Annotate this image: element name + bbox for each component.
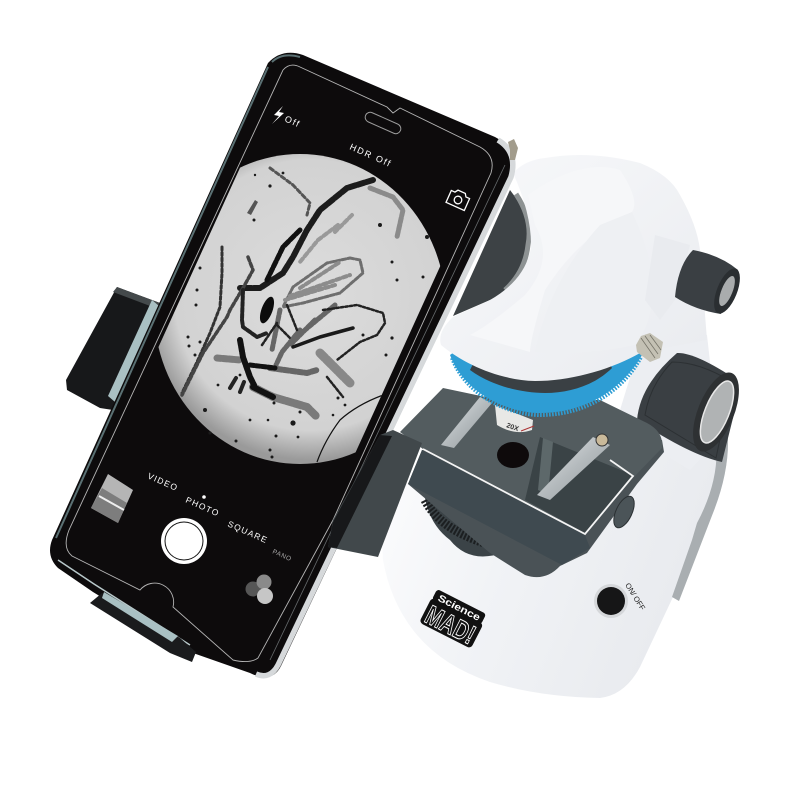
logo: Science (436, 593, 482, 624)
shutter button (161, 518, 207, 564)
blue turret ring (450, 340, 642, 415)
power button (594, 584, 628, 618)
microscope arm (620, 335, 727, 470)
camera modes (146, 471, 293, 563)
mode dot (202, 495, 206, 499)
left phone clamp (66, 287, 175, 410)
HDR label: HDR Off (348, 142, 393, 169)
stage front face (408, 450, 590, 565)
microscope base (380, 425, 728, 698)
base side rim (672, 425, 728, 601)
side button (610, 493, 638, 531)
large focus knob (637, 353, 748, 462)
speaker (364, 111, 402, 135)
phone top screw (508, 139, 518, 160)
microscope head (440, 155, 707, 381)
phone bottom highlight (58, 560, 190, 645)
slide clip left (441, 397, 492, 448)
stage hole (497, 442, 529, 468)
head screw (636, 333, 663, 362)
dark pod (260, 296, 274, 324)
microscope stage (400, 388, 664, 577)
stage underside (408, 440, 664, 577)
phone silver side (256, 140, 513, 676)
bottom phone clamp (90, 592, 196, 662)
dark filament outlines (240, 180, 373, 288)
objective lens: 20X (505, 422, 520, 433)
phone left edge highlight (56, 55, 300, 538)
flash label: Off (283, 114, 302, 129)
grey filament bodies (270, 168, 310, 215)
lower right arc (316, 394, 382, 462)
specimen specks (186, 172, 429, 458)
logo (418, 589, 488, 651)
right phone clamp (328, 430, 422, 557)
microscope view (154, 154, 446, 464)
flash icon (272, 106, 284, 124)
slide clip right (537, 437, 610, 500)
thumbnail (91, 474, 133, 523)
filter icon (246, 574, 273, 604)
phone body (50, 53, 515, 677)
camera flip icon (446, 188, 471, 210)
glass protector outline (66, 65, 492, 662)
turret collar (470, 345, 612, 393)
focus wheel under stage (425, 495, 510, 556)
camera modes: SQUARE (226, 519, 270, 545)
logo: MAD! (420, 600, 480, 650)
camera modes: VIDEO (146, 471, 180, 493)
objective lens (495, 405, 534, 433)
knob bracket (645, 235, 690, 320)
eyepiece tube (453, 190, 529, 316)
on off label: ON/ OFF (623, 581, 647, 612)
knob cap (684, 366, 748, 458)
camera modes: PANO (271, 548, 293, 563)
specimen strands (182, 168, 403, 417)
camera modes: PHOTO (184, 495, 221, 519)
stage top plate (400, 388, 662, 535)
small focus knob (675, 250, 745, 317)
head top highlight panel (470, 167, 634, 352)
mirror inset (525, 437, 633, 533)
clip screw (596, 434, 608, 446)
